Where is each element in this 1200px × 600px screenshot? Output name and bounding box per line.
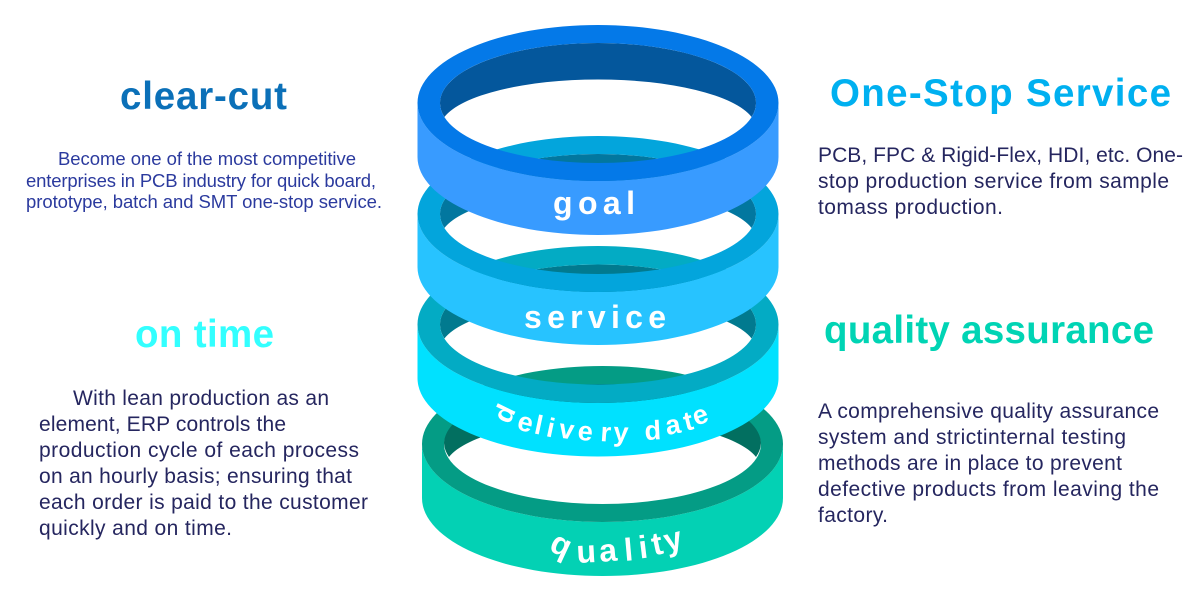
label: delivery date: delivery date bbox=[487, 398, 712, 448]
text block: one-stop service description: stop production service from sample bbox=[818, 170, 1169, 193]
text block: on time description bbox=[39, 387, 368, 540]
panel: quality assurance bbox=[818, 309, 1159, 527]
heading: One-Stop Service: One-Stop Service bbox=[830, 72, 1171, 115]
text block: quality assurance description bbox=[818, 400, 1159, 527]
chart: stacked rings bbox=[418, 25, 783, 576]
text block: clear-cut description: prototype, batch and SMT one-stop service. bbox=[26, 191, 382, 212]
ring: quality bbox=[422, 366, 783, 576]
label: quality: quality bbox=[545, 519, 686, 570]
heading: quality assurance: quality assurance bbox=[824, 309, 1154, 352]
text block: one-stop service description: tomass production. bbox=[818, 196, 1003, 219]
ring: goal bbox=[418, 25, 778, 235]
text block: quality assurance description: A comprehensive quality assurance bbox=[818, 400, 1159, 423]
heading: clear-cut: clear-cut bbox=[120, 75, 287, 118]
text block: on time description: element, ERP controls the bbox=[39, 413, 286, 436]
text block: clear-cut description bbox=[26, 148, 382, 212]
text block: on time description: With lean production as an bbox=[73, 387, 329, 410]
heading: on time: on time bbox=[135, 313, 274, 356]
panel: one-stop service bbox=[818, 72, 1183, 219]
text block: on time description: each order is paid to the customer bbox=[39, 491, 368, 514]
text block: on time description: production cycle of each process bbox=[39, 439, 359, 462]
text block: quality assurance description: factory. bbox=[818, 504, 888, 527]
ring: delivery date bbox=[418, 246, 778, 456]
text block: clear-cut description: enterprises in PCB industry for quick board, bbox=[26, 170, 376, 191]
text block: one-stop service description bbox=[818, 144, 1183, 219]
text block: quality assurance description: system and strictinternal testing bbox=[818, 426, 1126, 449]
text block: clear-cut description: Become one of the most competitive bbox=[58, 148, 356, 169]
text block: on time description: on an hourly basis; ensuring that bbox=[39, 465, 352, 488]
ring: service bbox=[418, 136, 778, 345]
label: goal: goal bbox=[553, 185, 635, 221]
text block: quality assurance description: methods are in place to prevent bbox=[818, 452, 1122, 475]
text block: quality assurance description: defective products from leaving the bbox=[818, 478, 1159, 501]
text block: one-stop service description: PCB, FPC & Rigid-Flex, HDI, etc. One- bbox=[818, 144, 1183, 167]
panel: clear-cut bbox=[26, 75, 382, 212]
panel: on time bbox=[39, 313, 368, 540]
label: service: service bbox=[524, 299, 666, 335]
text block: on time description: quickly and on time. bbox=[39, 517, 232, 540]
